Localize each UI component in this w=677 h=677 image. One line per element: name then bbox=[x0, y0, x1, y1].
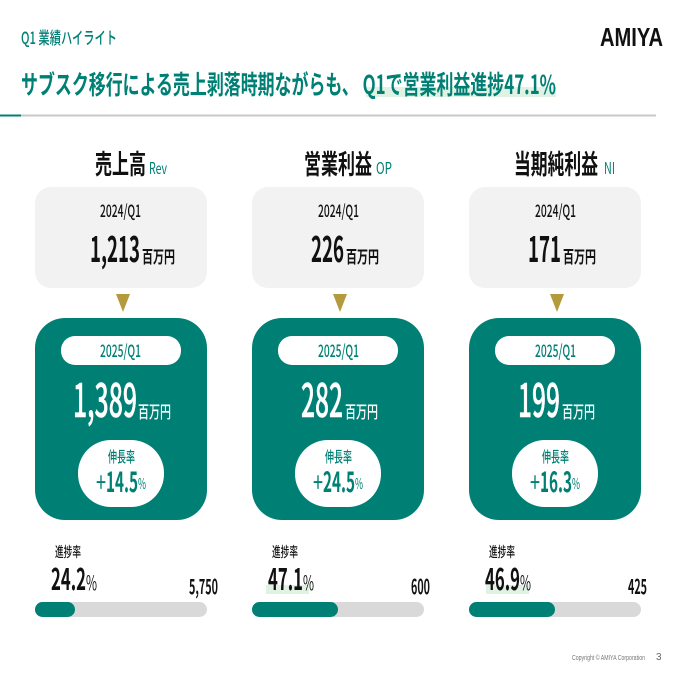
card: 2024 Q1 bbox=[469, 187, 641, 288]
card: 2024 Q1: 2024/Q1 bbox=[100, 197, 141, 222]
title highlight bbox=[366, 87, 556, 97]
unit label: NI: NI bbox=[604, 155, 615, 179]
header rule bbox=[0, 114, 656, 116]
card: 2025 Q1 bbox=[469, 318, 641, 520]
footer: copyright: Copyright © AMIYA Corporation bbox=[572, 654, 645, 662]
card: 2024 Q1: 2024/Q1 bbox=[318, 197, 359, 222]
progress: revenue: 5,750 bbox=[189, 571, 218, 600]
card: 2025 Q1: 伸長率 bbox=[542, 446, 569, 467]
arrow bbox=[116, 294, 130, 312]
card: 2025 Q1: 百万円 bbox=[138, 398, 171, 423]
section label: Q1 業績ハイライト bbox=[21, 24, 117, 49]
progress: net income bbox=[469, 542, 647, 617]
progress: revenue: % bbox=[86, 567, 97, 596]
heading: operating profit: 営業利益 bbox=[304, 143, 372, 182]
card: 2025 Q1: + bbox=[313, 461, 323, 500]
card: 2025 Q1 bbox=[252, 318, 424, 520]
progress: operating profit bbox=[252, 542, 430, 617]
card: 2025 Q1: 2025/Q1 bbox=[318, 337, 359, 362]
card: 2024 Q1: 171 bbox=[528, 222, 561, 273]
progress: revenue bbox=[35, 542, 218, 617]
card: 2025 Q1: % bbox=[572, 473, 580, 494]
panel: revenue bbox=[35, 143, 218, 617]
card: 2025 Q1: 282 bbox=[301, 365, 343, 431]
card: 2024 Q1: 226 bbox=[311, 222, 344, 273]
card: 2024 Q1: 百万円 bbox=[142, 243, 175, 268]
arrow bbox=[550, 294, 564, 312]
footer: page number: 3 bbox=[656, 652, 662, 663]
card: 2025 Q1: 百万円 bbox=[345, 398, 378, 423]
card: 2025 Q1: 16.3 bbox=[540, 461, 572, 501]
heading: net income: 当期純利益 bbox=[514, 143, 598, 182]
card: 2024 Q1: 1,213 bbox=[90, 222, 140, 273]
card: 2024 Q1: 2024/Q1 bbox=[535, 197, 576, 222]
progress: operating profit: 47.1 bbox=[268, 555, 303, 599]
progress: net income: 46.9 bbox=[485, 555, 520, 599]
card: 2024 Q1 bbox=[35, 187, 207, 288]
progress: revenue: 進捗率 bbox=[55, 542, 81, 562]
progress: operating profit: 進捗率 bbox=[272, 542, 298, 562]
card: 2025 Q1: 伸長率 bbox=[325, 446, 352, 467]
progress: net income: % bbox=[520, 567, 531, 596]
heading: revenue: 売上高 bbox=[95, 143, 146, 182]
progress: revenue: 24.2 bbox=[51, 555, 86, 599]
card: 2025 Q1: + bbox=[530, 461, 540, 500]
card: 2025 Q1: 2025/Q1 bbox=[535, 337, 576, 362]
card: 2025 Q1: 199 bbox=[518, 365, 560, 431]
unit label: OP: OP bbox=[376, 155, 392, 179]
panel: operating profit bbox=[252, 143, 430, 617]
panel: net income bbox=[469, 143, 647, 617]
card: 2025 Q1: 2025/Q1 bbox=[100, 337, 141, 362]
card: 2025 Q1: + bbox=[96, 461, 106, 500]
card: 2025 Q1: % bbox=[138, 473, 146, 494]
card: 2025 Q1: 百万円 bbox=[562, 398, 595, 423]
progress: operating profit: % bbox=[303, 567, 314, 596]
progress: net income: 進捗率 bbox=[489, 542, 515, 562]
card: 2024 Q1 bbox=[252, 187, 424, 288]
card: 2025 Q1: 伸長率 bbox=[108, 446, 135, 467]
card: 2024 Q1: 百万円 bbox=[346, 243, 379, 268]
progress: net income: 425 bbox=[628, 571, 647, 600]
card: 2025 Q1: % bbox=[355, 473, 363, 494]
card: 2025 Q1: 14.5 bbox=[106, 461, 138, 501]
card: 2024 Q1: 百万円 bbox=[563, 243, 596, 268]
card: 2025 Q1 bbox=[35, 318, 207, 520]
card: 2025 Q1: 1,389 bbox=[73, 365, 137, 431]
progress: operating profit: 600 bbox=[411, 571, 430, 600]
arrow bbox=[333, 294, 347, 312]
unit label: Rev: Rev bbox=[149, 155, 167, 179]
card: 2025 Q1: 24.5 bbox=[323, 461, 355, 501]
